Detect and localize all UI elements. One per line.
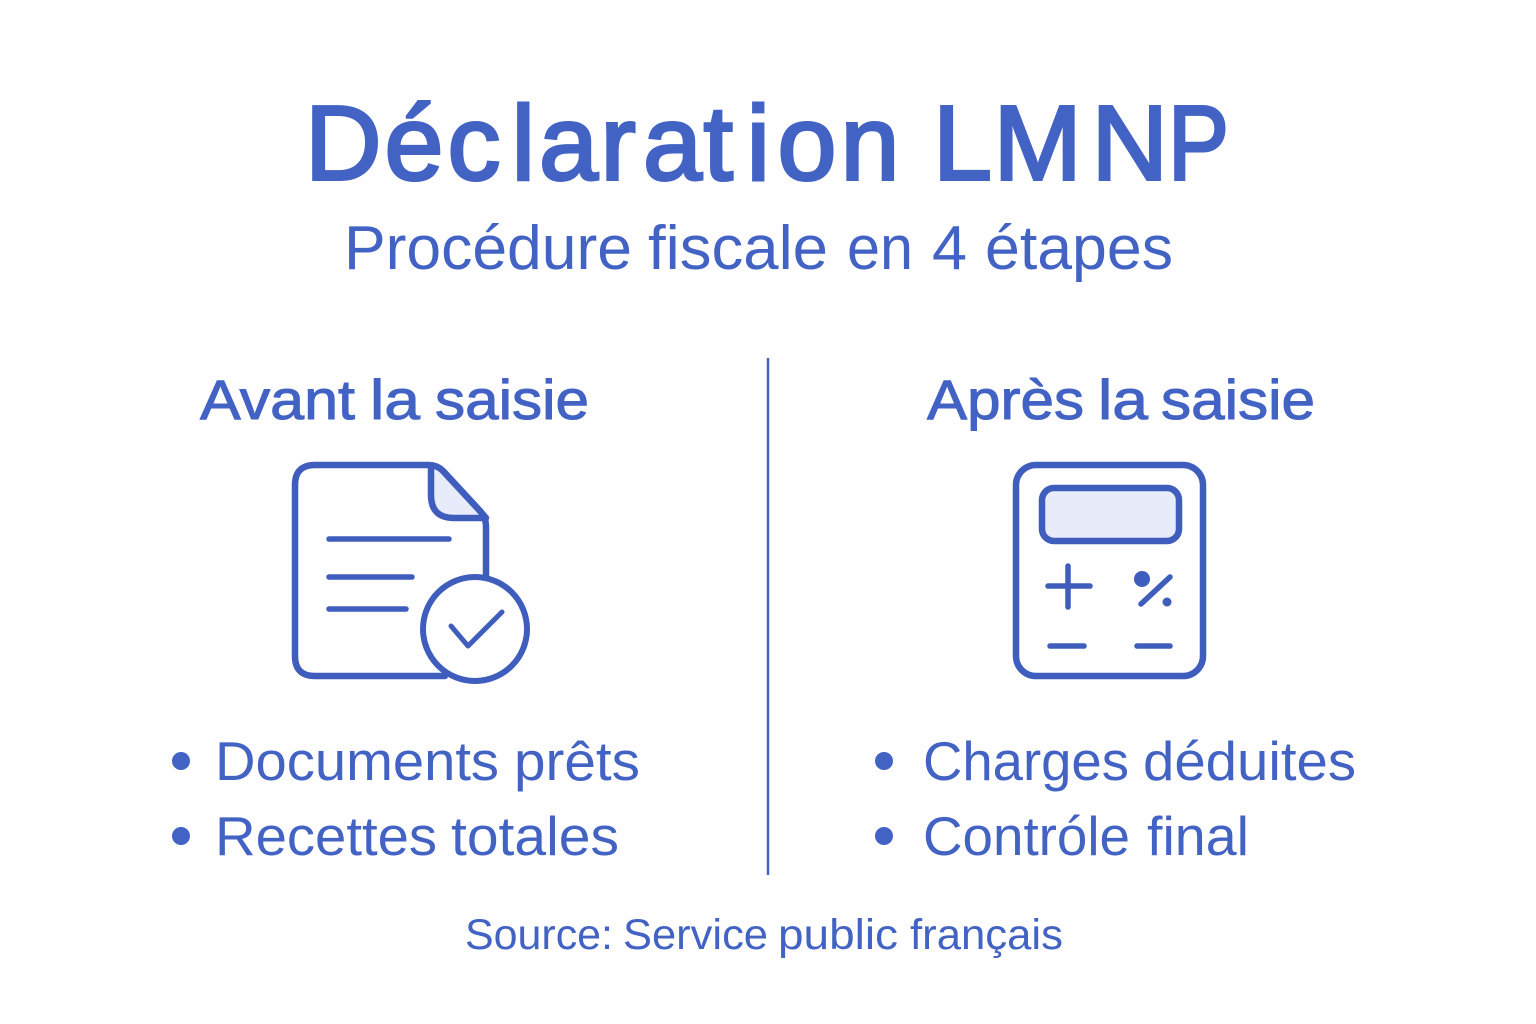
subtitle: 4 (932, 214, 967, 283)
subtitle: fiscale (648, 214, 828, 283)
title: LMN (933, 84, 1168, 202)
source note (465, 911, 1063, 959)
source note: Source: (465, 911, 613, 959)
heading: avant la saisie: la (370, 368, 421, 431)
heading: après la saisie: Après (927, 368, 1084, 431)
divider (767, 358, 769, 875)
heading: après la saisie: la (1098, 368, 1149, 431)
panel: avant la saisie (172, 368, 640, 867)
heading: avant la saisie: Avant (200, 368, 355, 431)
subtitle: en (847, 214, 913, 283)
subtitle (344, 214, 1173, 283)
bullet item: charges déduites: déduites (1143, 730, 1356, 792)
bullet item: contróle final (875, 805, 1249, 867)
panel: après la saisie (875, 368, 1356, 867)
bullet item: recettes totales (172, 805, 619, 867)
heading: après la saisie (927, 368, 1315, 431)
icon: document with check (295, 465, 527, 681)
bullet item: charges déduites: Charges (923, 730, 1129, 792)
heading: après la saisie: saisie (1161, 368, 1315, 431)
heading: avant la saisie: saisie (435, 368, 589, 431)
bullet item: documents prêts: prêts (514, 730, 640, 792)
heading: avant la saisie (200, 368, 589, 431)
title: P (1168, 84, 1229, 202)
bullet item: charges déduites (875, 730, 1356, 792)
bullet list: avant (172, 730, 640, 867)
subtitle: Procédure (344, 214, 632, 283)
title (305, 84, 1229, 202)
title: Déclaration (305, 84, 899, 202)
bullet list: après (875, 730, 1356, 867)
bullet item: contróle final: Contróle (923, 805, 1130, 867)
source note: public (778, 911, 898, 959)
bullet item: contróle final: final (1147, 805, 1249, 867)
bullet item: recettes totales: totales (451, 805, 619, 867)
bullet item: documents prêts: Documents (215, 730, 499, 792)
source note: Service (623, 911, 768, 959)
subtitle: étapes (985, 214, 1173, 283)
bullet item: recettes totales: Recettes (215, 805, 437, 867)
bullet item: documents prêts (172, 730, 640, 792)
source note: français (910, 911, 1063, 959)
icon: calculator (1016, 465, 1203, 676)
